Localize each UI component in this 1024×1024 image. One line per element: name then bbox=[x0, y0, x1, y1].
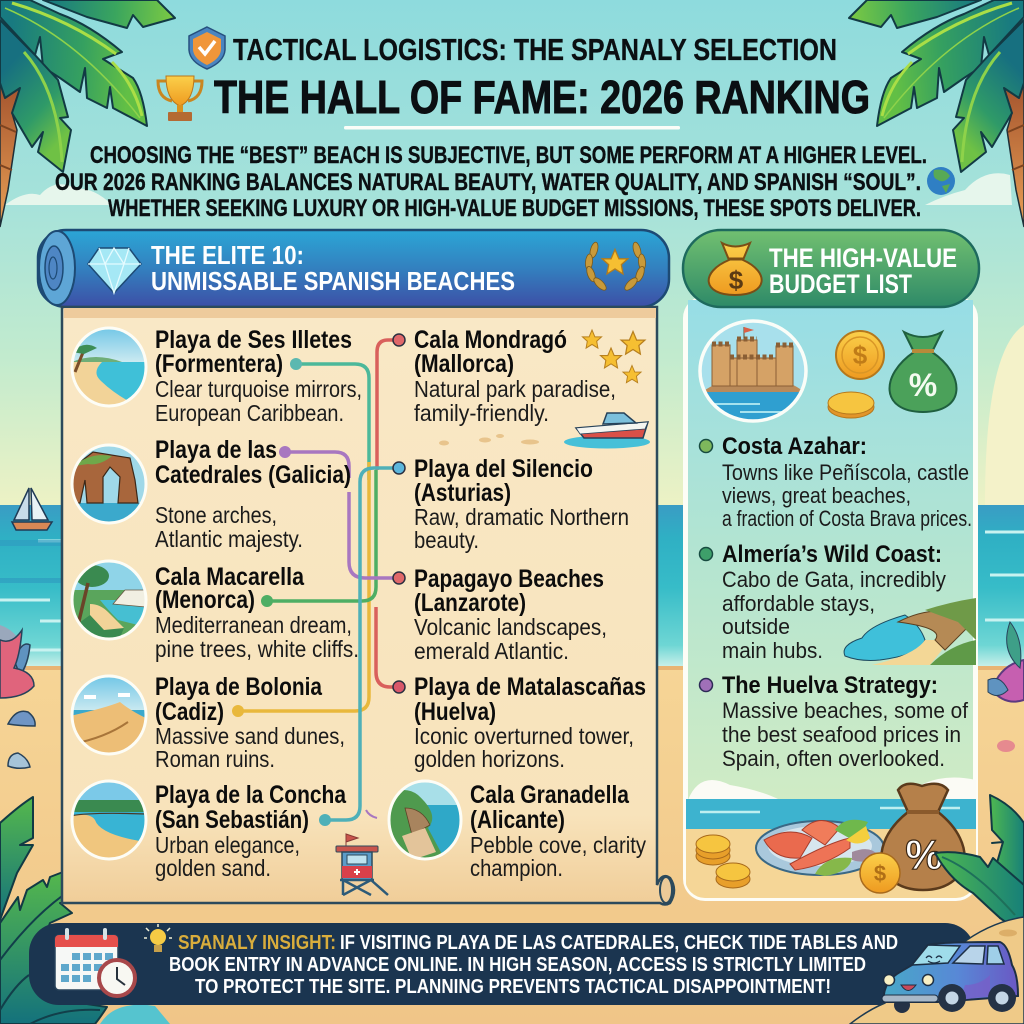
budget item: The Huelva Strategy: the best seafood prices in bbox=[722, 722, 961, 747]
beach: Ses Illetes bbox=[70, 326, 362, 426]
insight text: SPANALY INSIGHT: bbox=[178, 931, 336, 954]
beach: Cala Granadella bbox=[388, 780, 646, 881]
icon: money bag: $ bbox=[729, 265, 744, 295]
banner heading bbox=[769, 243, 957, 299]
intro text bbox=[55, 142, 927, 222]
beach: Las Catedrales: Stone arches, bbox=[155, 502, 277, 528]
beach: Cala Mondragó bbox=[414, 326, 616, 426]
icon: diamond bbox=[88, 248, 141, 293]
beach: Bolonia: Playa de Bolonia bbox=[155, 673, 323, 701]
icon: trophy bbox=[158, 76, 202, 121]
beach: Ses Illetes: European Caribbean. bbox=[155, 400, 344, 426]
icon: calendar with clock bbox=[55, 928, 135, 996]
header bbox=[55, 27, 955, 222]
connector dots bbox=[232, 334, 405, 826]
beach: Cala Granadella: (Alicante) bbox=[470, 806, 565, 834]
beach: Cala Mondragó: family-friendly. bbox=[414, 400, 549, 426]
budget item: Almería's Wild Coast: Almería’s Wild Coast: bbox=[722, 541, 942, 568]
main title: THE HALL OF FAME: 2026 RANKING bbox=[214, 71, 870, 123]
budget item: The Huelva Strategy bbox=[700, 672, 969, 771]
icon: green percent bag bbox=[890, 332, 956, 412]
banner heading: THE HIGH-VALUE bbox=[769, 243, 957, 273]
budget item: Costa Azahar: Towns like Peñíscola, castle bbox=[722, 460, 969, 485]
kicker heading: TACTICAL LOGISTICS: THE SPANALY SELECTION bbox=[233, 32, 837, 67]
beach: Cala Mondragó: (Mallorca) bbox=[414, 350, 514, 378]
icon: car bbox=[882, 942, 1018, 1013]
beach: Papagayo: Volcanic landscapes, bbox=[414, 614, 607, 640]
icon: coin: $ bbox=[874, 861, 886, 886]
icon: sailboat bbox=[12, 488, 52, 530]
beach: Cala Granadella: Pebble cove, clarity bbox=[470, 832, 646, 858]
beach: Cala Granadella: Cala Granadella bbox=[470, 781, 630, 809]
beach: Cala Macarella bbox=[70, 560, 359, 662]
beach: Playa del Silencio: beauty. bbox=[414, 527, 479, 553]
beach: Bolonia: Roman ruins. bbox=[155, 746, 275, 772]
icon: boat bbox=[564, 413, 650, 448]
budget item: Almería's Wild Coast: Cabo de Gata, incredibly bbox=[722, 567, 947, 592]
leaves bottom left bbox=[0, 797, 107, 1024]
beach: Ses Illetes: Playa de Ses Illetes bbox=[155, 326, 352, 354]
beach: Las Catedrales: Catedrales (Galicia) bbox=[155, 461, 351, 489]
circle: castle bbox=[700, 320, 806, 422]
insight text: TO PROTECT THE SITE. PLANNING PREVENTS TACTICAL DISAPPOINTMENT! bbox=[195, 975, 831, 998]
icon: globe bbox=[927, 167, 955, 195]
beach: La Concha: Urban elegance, bbox=[155, 832, 300, 858]
panel: elite 10 parchment bbox=[62, 307, 674, 904]
icon: lifeguard tower bbox=[336, 834, 388, 895]
insight text bbox=[169, 931, 898, 998]
icon: money bag bbox=[709, 243, 762, 295]
insight bar bbox=[29, 923, 975, 1005]
sand footprints bbox=[439, 434, 539, 446]
banner heading: UNMISSABLE SPANISH BEACHES bbox=[151, 266, 515, 296]
shells left bbox=[8, 711, 35, 768]
icon: gold coins: $ bbox=[853, 340, 868, 370]
insight text: IF VISITING PLAYA DE LAS CATEDRALES, CHECK TIDE TABLES AND bbox=[340, 931, 898, 954]
front leaf bottom right bbox=[935, 852, 1024, 935]
beach: Cala Mondragó: Natural park paradise, bbox=[414, 376, 616, 402]
coral right bbox=[988, 622, 1024, 752]
budget item: Almería's Wild Coast bbox=[700, 541, 947, 663]
beach: La Concha bbox=[70, 780, 347, 881]
banner: elite 10 bbox=[38, 230, 669, 307]
icon: coin stacks bbox=[696, 835, 750, 888]
beach: Las Catedrales: Playa de las bbox=[155, 436, 277, 464]
beach: Papagayo bbox=[414, 565, 607, 664]
banner heading bbox=[151, 240, 515, 296]
icon: seafood plate bbox=[756, 820, 884, 876]
beach: Bolonia: Massive sand dunes, bbox=[155, 723, 345, 749]
icon: gold coins bbox=[828, 331, 884, 418]
leaves bottom right bbox=[990, 795, 1024, 925]
beach: Cala Granadella: champion. bbox=[470, 855, 563, 881]
panel: high-value budget list bbox=[683, 296, 978, 901]
banner: high-value budget list bbox=[683, 230, 979, 307]
beach: Matalascañas: (Huelva) bbox=[414, 698, 496, 726]
budget item: The Huelva Strategy: Spain, often overlooked. bbox=[722, 746, 945, 771]
budget item: Costa Azahar: Costa Azahar: bbox=[722, 433, 867, 460]
scroll roll bbox=[39, 231, 75, 305]
beach: Playa del Silencio: (Asturias) bbox=[414, 479, 511, 507]
beach scene: bottom of panel bbox=[686, 778, 976, 901]
beach: Cala Mondragó: Cala Mondragó bbox=[414, 326, 567, 354]
icon: laurel star bbox=[585, 241, 646, 292]
budget item: The Huelva Strategy: The Huelva Strategy: bbox=[722, 672, 938, 699]
beach: Matalascañas: Iconic overturned tower, bbox=[414, 723, 634, 749]
beach: Bolonia: (Cadiz) bbox=[155, 698, 224, 726]
budget item: Almería's Wild Coast: main hubs. bbox=[722, 638, 823, 663]
icon: green percent bag: % bbox=[909, 367, 937, 403]
beach: Cala Macarella: pine trees, white cliffs. bbox=[155, 636, 359, 662]
icon: shield bbox=[189, 27, 225, 69]
beach: Ses Illetes: (Formentera) bbox=[155, 350, 283, 378]
beach: Cala Macarella: (Menorca) bbox=[155, 586, 255, 614]
beach: Las Catedrales bbox=[70, 436, 351, 552]
icon: brown bag bbox=[881, 784, 965, 890]
budget item: Almería's Wild Coast: affordable stays, bbox=[722, 591, 875, 616]
budget item: Costa Azahar: views, great beaches, bbox=[722, 483, 911, 508]
icon: light bulb bbox=[144, 924, 172, 952]
budget item: Costa Azahar bbox=[700, 433, 972, 531]
palm tree top right bbox=[849, 0, 1024, 227]
budget item: The Huelva Strategy: Massive beaches, some of bbox=[722, 698, 969, 723]
icon: gold stars bbox=[582, 330, 645, 383]
beach: Matalascañas bbox=[414, 673, 646, 772]
beach: Playa del Silencio bbox=[414, 455, 629, 553]
beach: Matalascañas: golden horizons. bbox=[414, 746, 565, 772]
banner heading: THE ELITE 10: bbox=[151, 240, 304, 270]
beach: Playa del Silencio: Raw, dramatic Northern bbox=[414, 504, 629, 530]
beach: La Concha: Playa de la Concha bbox=[155, 781, 347, 809]
beach: Cala Macarella: Cala Macarella bbox=[155, 563, 305, 591]
sand mound and car bbox=[850, 917, 1024, 1024]
beach: Bolonia bbox=[70, 673, 345, 772]
banner heading: BUDGET LIST bbox=[769, 269, 912, 299]
beach: Playa del Silencio: Playa del Silencio bbox=[414, 455, 593, 483]
insight text: BOOK ENTRY IN ADVANCE ONLINE. IN HIGH SEASON, ACCESS IS STRICTLY LIMITED bbox=[169, 953, 866, 976]
beach: La Concha: golden sand. bbox=[155, 855, 271, 881]
beach: Cala Macarella: Mediterranean dream, bbox=[155, 612, 352, 638]
beach: Papagayo: emerald Atlantic. bbox=[414, 638, 569, 664]
beach: La Concha: (San Sebastián) bbox=[155, 806, 309, 834]
icon: coin bbox=[860, 853, 900, 893]
beach: Papagayo: Papagayo Beaches bbox=[414, 565, 604, 593]
icon: brown bag: % bbox=[905, 831, 943, 878]
beach: Las Catedrales: Atlantic majesty. bbox=[155, 526, 303, 552]
beach: Ses Illetes: Clear turquoise mirrors, bbox=[155, 376, 362, 402]
inset coast bbox=[844, 598, 976, 665]
budget item: Almería's Wild Coast: outside bbox=[722, 614, 790, 639]
beach: Papagayo: (Lanzarote) bbox=[414, 589, 526, 617]
coral left bbox=[0, 625, 34, 698]
beach: Matalascañas: Playa de Matalascañas bbox=[414, 673, 646, 701]
connector lines bbox=[238, 340, 399, 820]
palm tree top left bbox=[0, 0, 175, 227]
